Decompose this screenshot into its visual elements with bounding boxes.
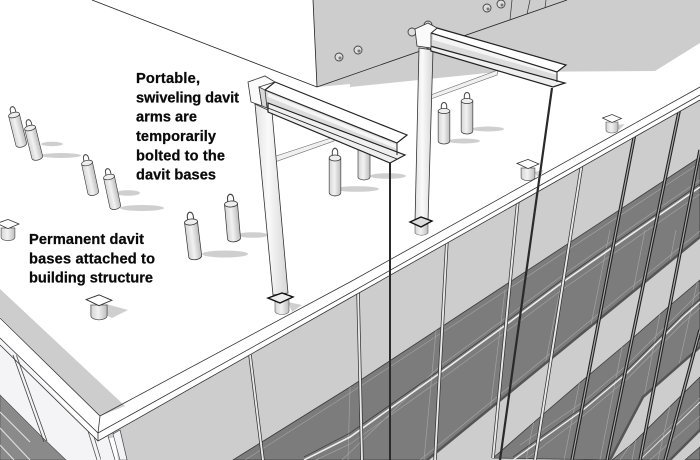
window bands	[233, 157, 700, 460]
callout: portable davit arms: arms are	[136, 110, 197, 126]
callout: permanent davit bases	[29, 232, 155, 286]
rooftop mechanical box and its shadow	[92, 0, 700, 87]
callout: portable davit arms: temporarily	[136, 129, 217, 145]
callout: portable davit arms: Portable,	[136, 71, 200, 87]
building wall: right face with window bands	[98, 100, 700, 460]
parapet coping	[0, 87, 700, 441]
callout: portable davit arms: davit bases	[136, 168, 216, 184]
callout: permanent davit bases: building structure	[29, 270, 153, 286]
callout: permanent davit bases: bases attached to	[29, 251, 155, 267]
permanent davit bases	[0, 114, 621, 320]
callout: portable davit arms: bolted to the	[136, 148, 225, 164]
rope 1	[389, 163, 391, 460]
callout: permanent davit bases: Permanent davit	[29, 232, 144, 248]
pane bevels inside bands	[245, 163, 700, 460]
callout: portable davit arms: swiveling davit	[136, 90, 239, 106]
davit arm bolts	[7, 92, 473, 260]
callout: portable davit arms	[136, 71, 239, 184]
cast shadows on roof	[41, 124, 625, 318]
davit arm 1	[248, 76, 407, 314]
horizontal transoms	[304, 184, 700, 460]
davit arm 2	[410, 23, 566, 235]
back leg of arm 1	[358, 145, 370, 180]
rope 2	[500, 88, 552, 460]
building wall: left face	[0, 338, 115, 460]
mullions	[250, 107, 700, 460]
